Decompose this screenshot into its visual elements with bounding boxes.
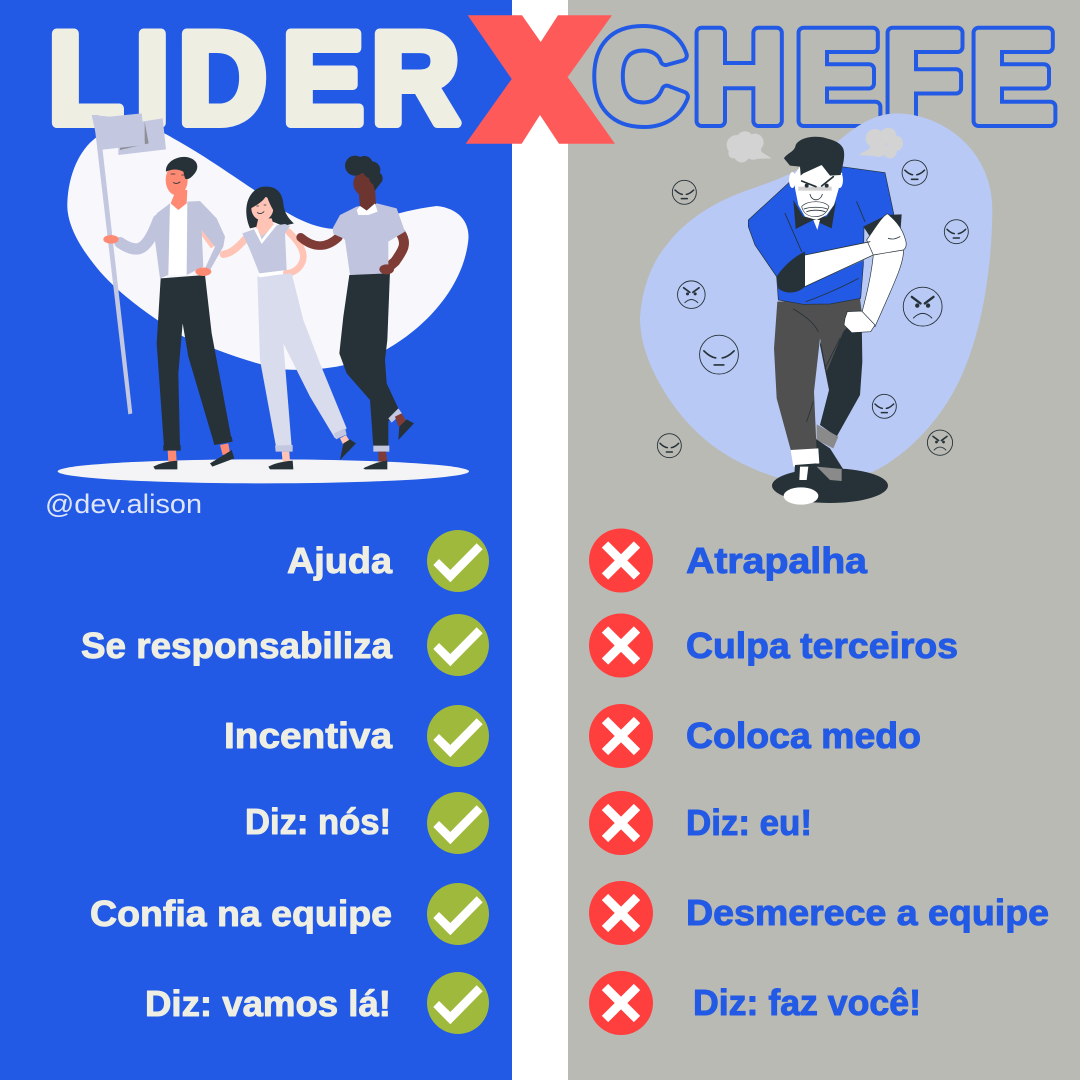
item: Diz: faz você!: Diz: faz você! [693, 982, 921, 1023]
item: Confia na equipe: Confia na equipe [90, 893, 392, 934]
floor shadow [772, 468, 888, 503]
item: Ajuda: Ajuda [287, 540, 393, 581]
item: Culpa terceiros: Culpa terceiros [686, 625, 958, 666]
blob background [640, 113, 992, 482]
icon: cross 1 [589, 528, 653, 592]
cloud: left steam [727, 131, 772, 162]
icon: cross 2 [589, 614, 653, 678]
person: man with polo [301, 156, 414, 469]
icon: check 1 [427, 530, 489, 592]
blob background [67, 126, 469, 370]
item: Incentiva: Incentiva [224, 715, 393, 756]
item: Desmerece a equipe: Desmerece a equipe [686, 892, 1049, 933]
item: Diz: vamos lá!: Diz: vamos lá! [145, 983, 391, 1024]
item: Diz: eu!: Diz: eu! [686, 802, 812, 843]
icon: check 4 [427, 792, 489, 854]
ground ellipse [58, 459, 469, 483]
icon: cross 4 [589, 791, 653, 855]
boss figure [748, 137, 906, 505]
title: CHEFE outlined: CHEFE [594, 6, 1055, 149]
icon: cross 3 [589, 704, 653, 768]
list: chefe traits [686, 540, 1049, 1023]
person: man with flag [103, 157, 234, 469]
title: LIDER: LIDER [48, 6, 460, 151]
cross icons [589, 528, 653, 1035]
title: CHEFE outlined: CHEFE [594, 6, 1055, 149]
illustration: angry boss [640, 113, 992, 505]
item: Atrapalha: Atrapalha [686, 540, 868, 581]
icon: check 3 [427, 705, 489, 767]
icon: check 2 [427, 614, 489, 676]
panel: líder background [0, 0, 512, 1080]
icon: cross 5 [589, 881, 653, 945]
icon: cross 6 [589, 971, 653, 1035]
item: Diz: nós!: Diz: nós! [245, 801, 391, 842]
title: X [466, 15, 615, 144]
handle: @dev.alison [45, 489, 202, 519]
item: Se responsabiliza: Se responsabiliza [81, 625, 393, 666]
panel: chefe background [568, 0, 1080, 1080]
illustration: team of leaders with flag [58, 113, 469, 483]
icon: check 5 [427, 883, 489, 945]
item: Coloca medo: Coloca medo [686, 715, 921, 756]
flag [92, 113, 166, 414]
check icons [427, 530, 489, 1034]
angry face icons [657, 160, 968, 458]
icon: check 6 [427, 972, 489, 1034]
person: woman [223, 187, 356, 469]
list: líder traits [81, 540, 393, 1024]
cloud: right steam [858, 128, 903, 158]
